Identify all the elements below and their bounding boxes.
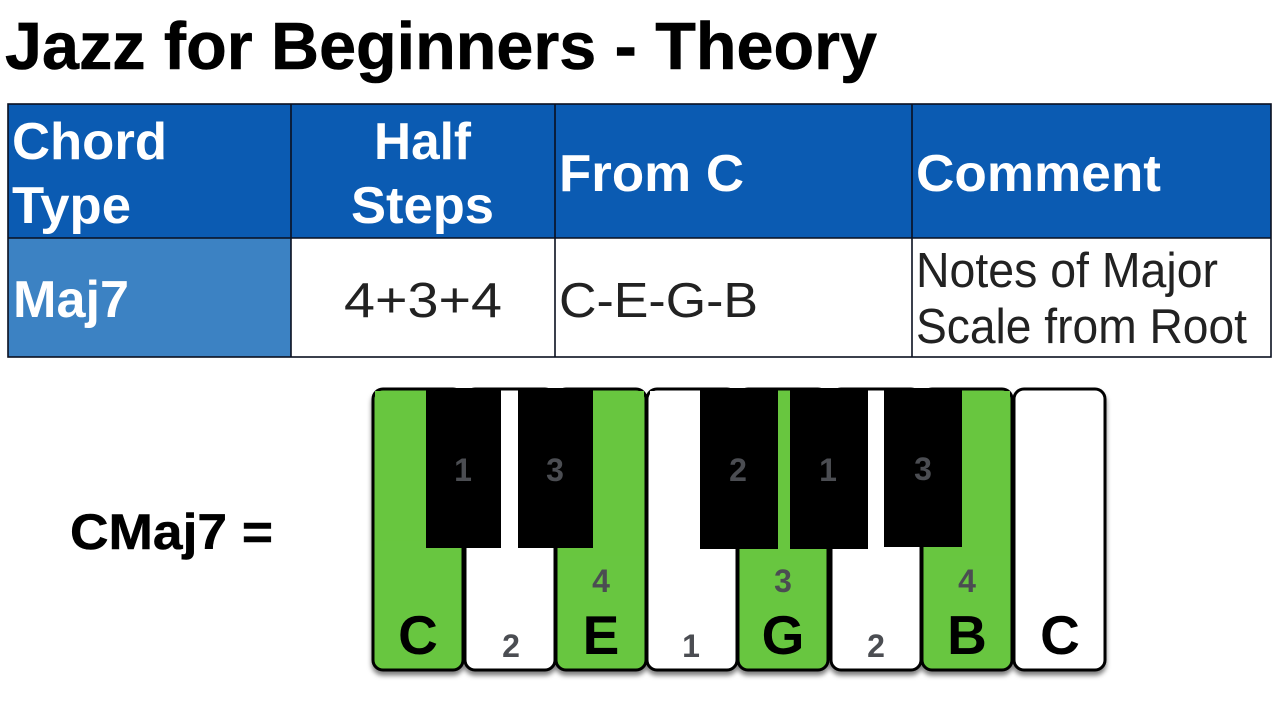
chord type: Maj7: Maj7 xyxy=(13,271,129,329)
half step counts: 2 xyxy=(502,628,520,664)
comment text: Notes of Major xyxy=(916,244,1218,298)
coloured key upper sections xyxy=(375,391,1010,556)
white key upper sections xyxy=(490,391,890,556)
half step counts: 2 xyxy=(867,628,885,664)
note names: C xyxy=(1040,604,1080,666)
chord table xyxy=(8,104,1271,357)
equation label: CMaj7 = xyxy=(70,504,273,560)
header: half steps: Steps xyxy=(351,177,494,235)
notes from C: C-E-G-B xyxy=(559,274,758,328)
comment text xyxy=(916,244,1247,354)
table header row xyxy=(8,104,1271,238)
header: half steps xyxy=(351,113,494,235)
table data row xyxy=(8,238,1247,357)
header: comment: Comment xyxy=(916,145,1161,203)
half step counts: 4 xyxy=(592,563,610,599)
half step counts: 2 xyxy=(729,452,747,488)
black keys xyxy=(426,388,962,549)
half steps value: 4+3+4 xyxy=(344,274,502,328)
half step counts xyxy=(454,451,976,664)
note names: E xyxy=(583,604,619,666)
note names: C xyxy=(398,604,438,666)
half step counts: 3 xyxy=(546,452,564,488)
header: half steps: Half xyxy=(374,113,472,171)
half step counts: 4 xyxy=(958,563,976,599)
table header row: Type xyxy=(12,177,131,235)
half step counts: 1 xyxy=(819,452,837,488)
piano keyboard xyxy=(373,388,1105,670)
note names: B xyxy=(947,604,987,666)
half step counts: 1 xyxy=(682,628,700,664)
header: from C: From C xyxy=(559,145,744,203)
title: Jazz for Beginners - Theory xyxy=(5,9,877,84)
half step counts: 1 xyxy=(454,452,472,488)
half step counts: 3 xyxy=(914,451,932,487)
note names xyxy=(398,604,1080,666)
comment text: Scale from Root xyxy=(916,300,1247,354)
header: chord type: Chord xyxy=(12,113,167,171)
half step counts: 3 xyxy=(774,563,792,599)
note names: G xyxy=(762,604,804,666)
white keys xyxy=(373,389,1105,670)
